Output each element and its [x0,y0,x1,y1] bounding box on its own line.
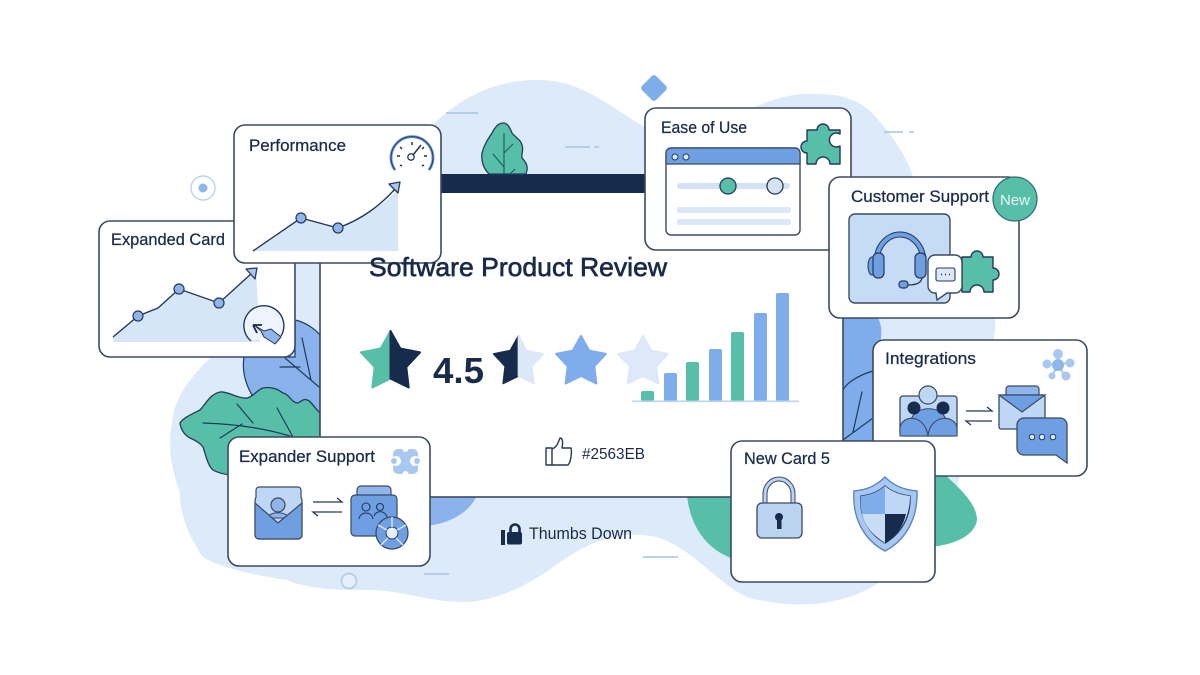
icon: speech bubble [928,255,962,300]
star: pale [618,336,668,383]
icon: exchange arrows [966,407,992,425]
gauge icon [244,306,284,344]
navy header bar [320,174,843,193]
background blob [170,80,995,604]
icon: network badge [376,517,408,549]
card: Customer Support [829,177,1037,318]
heading: New Card 5 [744,450,830,468]
icon: envelope [999,386,1045,429]
decoration: dashes [424,113,914,574]
central panel [320,174,843,497]
star: blue [556,336,606,383]
label: Thumbs Down [529,525,632,543]
card: Performance [234,125,441,263]
decoration: ring with dot [191,176,215,200]
gauge icon [391,137,433,170]
icon: padlock [757,479,802,538]
icon: people [900,386,957,436]
heading: Ease of Use [661,119,747,137]
title: Software Product Review [369,252,667,282]
heading: Integrations [885,350,976,368]
card: Integrations [873,340,1087,476]
area chart [113,268,260,342]
leaf: blue left [243,320,320,420]
line chart [253,182,400,251]
plant [482,123,527,174]
icon: people folder [351,486,397,536]
badge: New: New [1000,192,1030,209]
heading: Expanded Card [111,231,225,249]
rating stars and score [361,331,668,391]
star: teal and navy [361,331,420,388]
heading: Customer Support [851,188,989,206]
icon: thumb lock [501,524,522,545]
card: New Card 5 [731,441,935,582]
bar chart [632,293,799,402]
leaf: blue right [843,318,881,441]
thumbs up [546,438,645,465]
green blob under panel [687,475,977,558]
icon: exchange arrows [313,498,342,516]
heading: Expander Support [239,448,375,466]
leaf: green left [180,388,320,480]
decoration: small circle [342,574,356,588]
icon: shield [854,477,917,551]
badge: New [993,177,1037,221]
app window [666,148,800,235]
thumbs down [501,524,632,545]
label: #2563EB [582,446,645,463]
blue blob under panel [425,495,477,526]
icon: cluster [1042,349,1074,380]
heading: Performance [249,137,346,155]
icon: puzzle [801,124,840,164]
headset panel [849,214,950,303]
icon: thumb up [546,438,571,465]
decoration: diamond [640,74,668,102]
card: Ease of Use [645,108,851,250]
icon: pale puzzle [391,446,420,477]
star: navy and pale [494,336,543,383]
icon: envelope with person [255,487,302,539]
icon: puzzle [962,251,999,292]
card: Expander Support [228,437,430,566]
icon: chat bubble [1017,418,1067,463]
card: Expanded Card [99,221,295,357]
score: 4.5 [433,350,484,391]
